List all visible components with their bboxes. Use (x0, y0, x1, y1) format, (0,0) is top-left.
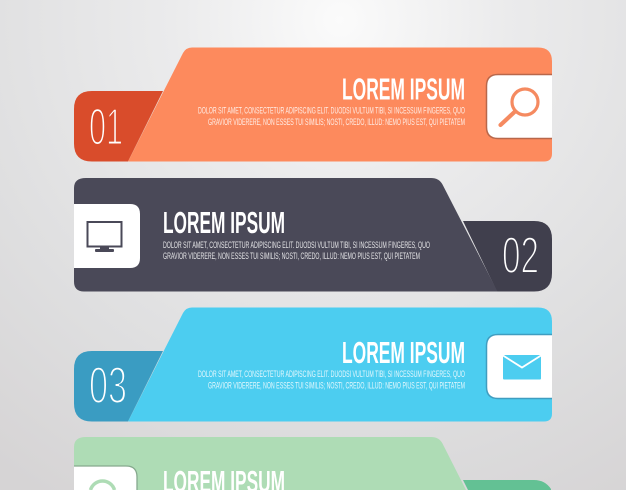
number tab 03 (74, 351, 163, 422)
main dark banner (74, 178, 498, 292)
body text: GRAVIOR VIDERERE, NON ESSES TUI SIMILIS; NOSTI, CREDO, ILLUD: NEMO PIUS EST, QUI PIETATEM (163, 251, 420, 262)
panel: step 04 green (74, 437, 551, 490)
number 01: 01 (89, 98, 123, 156)
number tab 04 (463, 480, 551, 490)
heading: LOREM IPSUM (342, 72, 465, 106)
number 03: 03 (89, 357, 127, 415)
icon: magnifier (486, 74, 552, 139)
icon: monitor (74, 204, 140, 268)
number tab 02 (463, 221, 552, 292)
body text (163, 240, 430, 262)
panel: step 01 orange (74, 48, 552, 162)
number 02: 02 (502, 227, 539, 285)
body text (198, 106, 465, 128)
main orange banner (128, 48, 552, 162)
panel: step 02 dark (74, 178, 552, 292)
heading: LOREM IPSUM (163, 205, 285, 240)
body text (198, 369, 465, 392)
panel: step 03 blue (74, 308, 552, 422)
number tab 01 (74, 91, 163, 162)
icon: green circle (74, 466, 137, 490)
icon: envelope (486, 334, 552, 399)
heading: LOREM IPSUM (342, 335, 465, 370)
main blue banner (128, 308, 552, 422)
main green banner (74, 437, 466, 490)
